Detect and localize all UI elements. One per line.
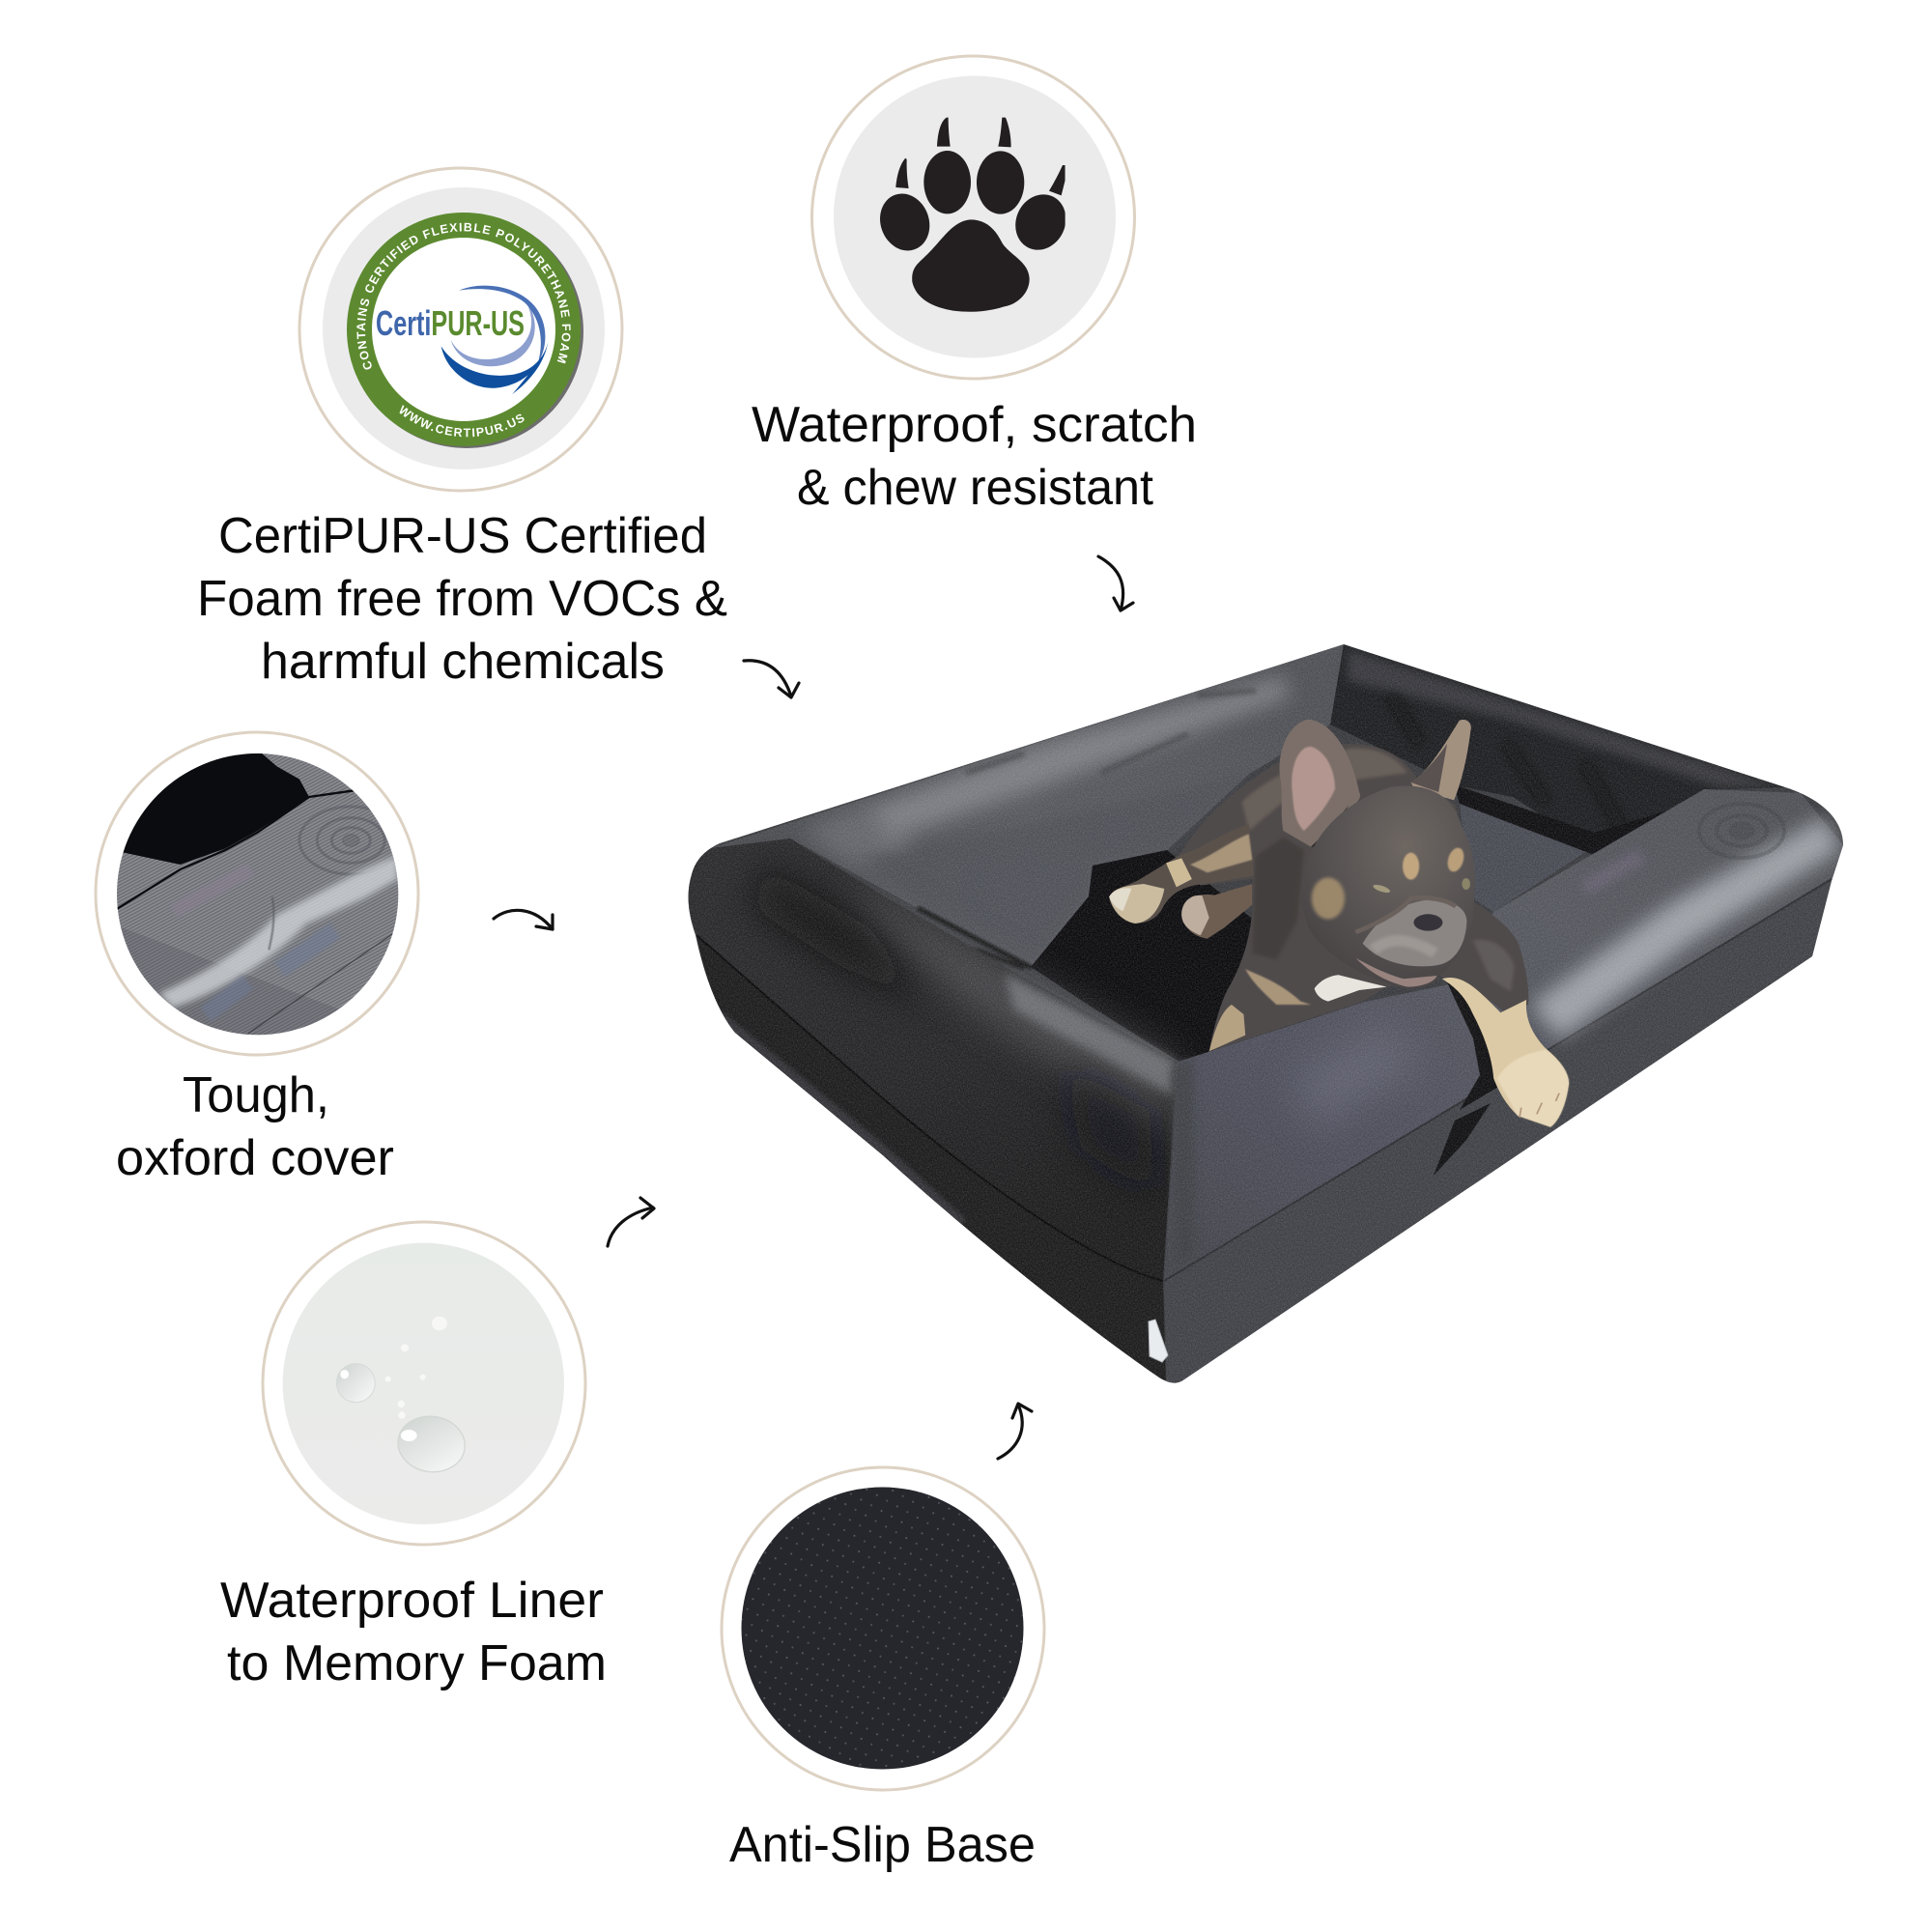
fabric texture bbox=[676, 628, 1855, 1401]
product: dog bed with french bulldog bbox=[676, 628, 1855, 1401]
CertiPUR-US logo: WWW.CERTIPUR.US bbox=[400, 405, 525, 437]
panel: anti-slip base bbox=[722, 1467, 1044, 1790]
heading: CertiPUR-US caption: CertiPUR-US Certified bbox=[218, 508, 707, 564]
back-left rim panel bbox=[711, 644, 1344, 967]
heading: waterproof scratch caption: Waterproof, scratch bbox=[752, 397, 1197, 453]
front arm bbox=[1442, 978, 1569, 1127]
big ear bbox=[1280, 720, 1360, 847]
heading: anti-slip caption: Anti-Slip Base bbox=[729, 1817, 1036, 1873]
heading: oxford cover caption: oxford cover bbox=[116, 1130, 394, 1186]
left outer face bbox=[689, 838, 1177, 1281]
badge ring bbox=[299, 168, 622, 491]
panel: CertiPUR-US certified foam bbox=[298, 166, 624, 493]
heading: waterproof scratch caption: & chew resistant bbox=[797, 460, 1154, 516]
right rim panel bbox=[1164, 789, 1843, 1281]
dog body bbox=[1179, 744, 1528, 1051]
fold across floor edge bbox=[918, 908, 1032, 968]
far paw bbox=[1181, 884, 1252, 939]
arrow: from cover swatch to bed bbox=[494, 910, 553, 929]
badge grey disc bbox=[323, 187, 605, 469]
back-right wall bbox=[1330, 644, 1785, 848]
far ear bbox=[1411, 720, 1471, 800]
arrow: from paw caption to bed bbox=[1098, 556, 1133, 611]
dotted non-slip swatch bbox=[742, 1488, 1024, 1770]
eyes bbox=[1372, 883, 1391, 895]
white chest bbox=[1315, 975, 1387, 1002]
panel: waterproof liner bbox=[263, 1222, 585, 1545]
arrow: from liner swatch to bed bbox=[608, 1198, 654, 1246]
liner ring bbox=[263, 1222, 585, 1545]
heading: waterproof scratch caption bbox=[752, 397, 1197, 516]
panel: paw scratch resistance bbox=[811, 56, 1134, 379]
paw toe details bbox=[1520, 1094, 1559, 1118]
paw grey disc bbox=[834, 75, 1116, 357]
heading: CertiPUR-US caption: harmful chemicals bbox=[261, 634, 665, 690]
fabric swatch bbox=[117, 753, 398, 1036]
shoulder highlight bbox=[1473, 940, 1515, 992]
CertiPUR-US logo: CONTAINS CERTIFIED FLEXIBLE POLYURETHANE FOAM bbox=[356, 222, 571, 369]
heading: CertiPUR-US caption: Foam free from VOCs & bbox=[197, 571, 727, 627]
hind leg and paw bbox=[1109, 824, 1254, 923]
tan chest stripes bbox=[1209, 1005, 1245, 1051]
brow and cheek markings bbox=[1403, 853, 1419, 880]
right lower band bbox=[1164, 879, 1832, 1383]
bed bbox=[676, 628, 1855, 1401]
heading: CertiPUR-US caption bbox=[197, 508, 727, 690]
base ring bbox=[722, 1467, 1044, 1790]
CertiPUR-US logo: CertiPUR-US bbox=[376, 303, 525, 343]
head bbox=[1300, 786, 1475, 989]
icon: paw print with claws bbox=[872, 118, 1075, 312]
muzzle bbox=[1363, 899, 1466, 966]
arrow: from CertiPUR caption to bed bbox=[744, 661, 799, 697]
heading: oxford cover caption bbox=[116, 1067, 394, 1186]
bed tag bbox=[1149, 1320, 1168, 1362]
CertiPUR-US logo bbox=[347, 213, 583, 448]
left lower band bbox=[696, 935, 1166, 1382]
panel: oxford cover bbox=[96, 732, 418, 1055]
heading: oxford cover caption: Tough, bbox=[183, 1067, 329, 1123]
inner floor cushion bbox=[1031, 850, 1256, 1062]
fabric ring bbox=[96, 732, 418, 1055]
heading: waterproof liner caption: to Memory Foam bbox=[227, 1635, 607, 1691]
heading: waterproof liner caption bbox=[220, 1573, 607, 1691]
rim highlights bbox=[1531, 816, 1840, 1038]
french bulldog bbox=[1109, 720, 1569, 1127]
strap under arm bbox=[1434, 982, 1500, 1176]
paw ring bbox=[811, 56, 1134, 379]
heading: waterproof liner caption: Waterproof Liner bbox=[220, 1573, 604, 1629]
arrow: from base swatch to bed bbox=[998, 1404, 1032, 1459]
water droplets swatch bbox=[280, 1239, 567, 1526]
